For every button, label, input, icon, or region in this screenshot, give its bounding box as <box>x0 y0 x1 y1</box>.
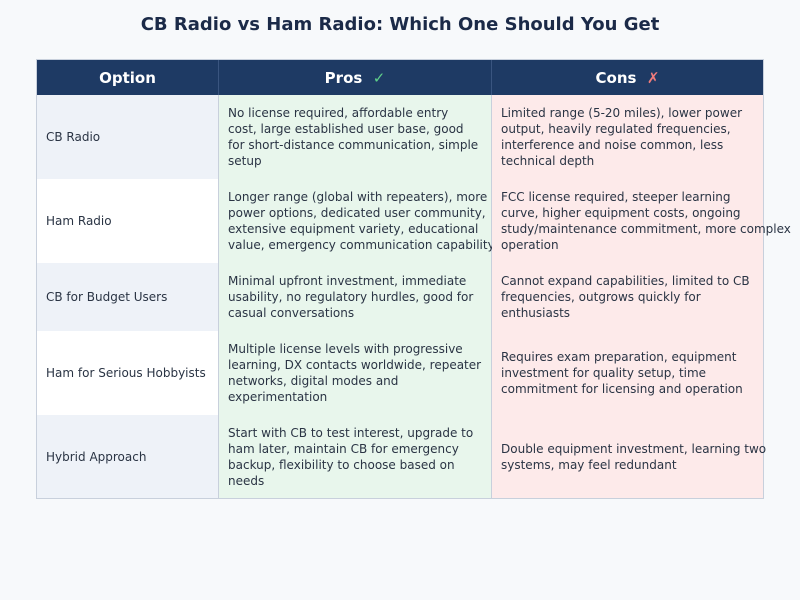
row 4 <box>46 331 763 415</box>
row 2: operation <box>501 238 559 252</box>
row 1: interference and noise common, less <box>501 138 723 152</box>
row 3: casual conversations <box>228 306 354 320</box>
table <box>36 59 764 499</box>
row 4: Ham for Serious Hobbyists <box>46 366 206 380</box>
row 1: cost, large established user base, good <box>228 122 464 136</box>
row 5 <box>37 415 766 498</box>
row 5: systems, may feel redundant <box>501 458 677 472</box>
header: pros: ✓ <box>373 69 385 87</box>
row 2: power options, dedicated user community, <box>228 206 486 220</box>
header: option <box>37 60 219 96</box>
row 1: technical depth <box>501 154 594 168</box>
row 2: Longer range (global with repeaters), more <box>228 190 487 204</box>
header: cons: Cons <box>596 69 636 87</box>
row 4: Multiple license levels with progressive <box>228 342 463 356</box>
header: pros <box>219 60 492 96</box>
row 4: networks, digital modes and <box>228 374 398 388</box>
row 1: No license required, affordable entry <box>228 106 448 120</box>
header: cons <box>492 60 763 96</box>
row 5: Double equipment investment, learning two <box>501 442 766 456</box>
row 1: Limited range (5-20 miles), lower power <box>501 106 742 120</box>
row 2: study/maintenance commitment, more complex <box>501 222 791 236</box>
row 2: extensive equipment variety, educational <box>228 222 478 236</box>
row 5: ham later, maintain CB for emergency <box>228 442 459 456</box>
row 1: CB Radio <box>46 130 100 144</box>
title: CB Radio vs Ham Radio: Which One Should You Get <box>141 14 659 35</box>
header: pros: Pros <box>325 69 362 87</box>
row 2: FCC license required, steeper learning <box>501 190 731 204</box>
row 5: needs <box>228 474 264 488</box>
row 3 <box>37 263 763 331</box>
row 2: Ham Radio <box>46 214 112 228</box>
row 3: CB for Budget Users <box>46 290 167 304</box>
row 4: commitment for licensing and operation <box>501 382 743 396</box>
header: option: Option <box>99 69 156 87</box>
row 5: backup, flexibility to choose based on <box>228 458 455 472</box>
header: cons: ✗ <box>647 69 659 87</box>
row 1: output, heavily regulated frequencies, <box>501 122 731 136</box>
row 4: learning, DX contacts worldwide, repeater <box>228 358 481 372</box>
row 2: value, emergency communication capability <box>228 238 495 252</box>
row 3: frequencies, outgrows quickly for <box>501 290 701 304</box>
row 3: enthusiasts <box>501 306 570 320</box>
row 4: Requires exam preparation, equipment <box>501 350 736 364</box>
row 2 <box>46 179 791 263</box>
row 5: Hybrid Approach <box>46 450 146 464</box>
row 1: setup <box>228 154 262 168</box>
row 3: Minimal upfront investment, immediate <box>228 274 466 288</box>
row 4: experimentation <box>228 390 327 404</box>
row 3: usability, no regulatory hurdles, good for <box>228 290 473 304</box>
row 4: investment for quality setup, time <box>501 366 706 380</box>
row 5: Start with CB to test interest, upgrade to <box>228 426 473 440</box>
row 1 <box>37 95 763 179</box>
row 2: curve, higher equipment costs, ongoing <box>501 206 741 220</box>
row 1: for short-distance communication, simple <box>228 138 478 152</box>
row 3: Cannot expand capabilities, limited to CB <box>501 274 750 288</box>
